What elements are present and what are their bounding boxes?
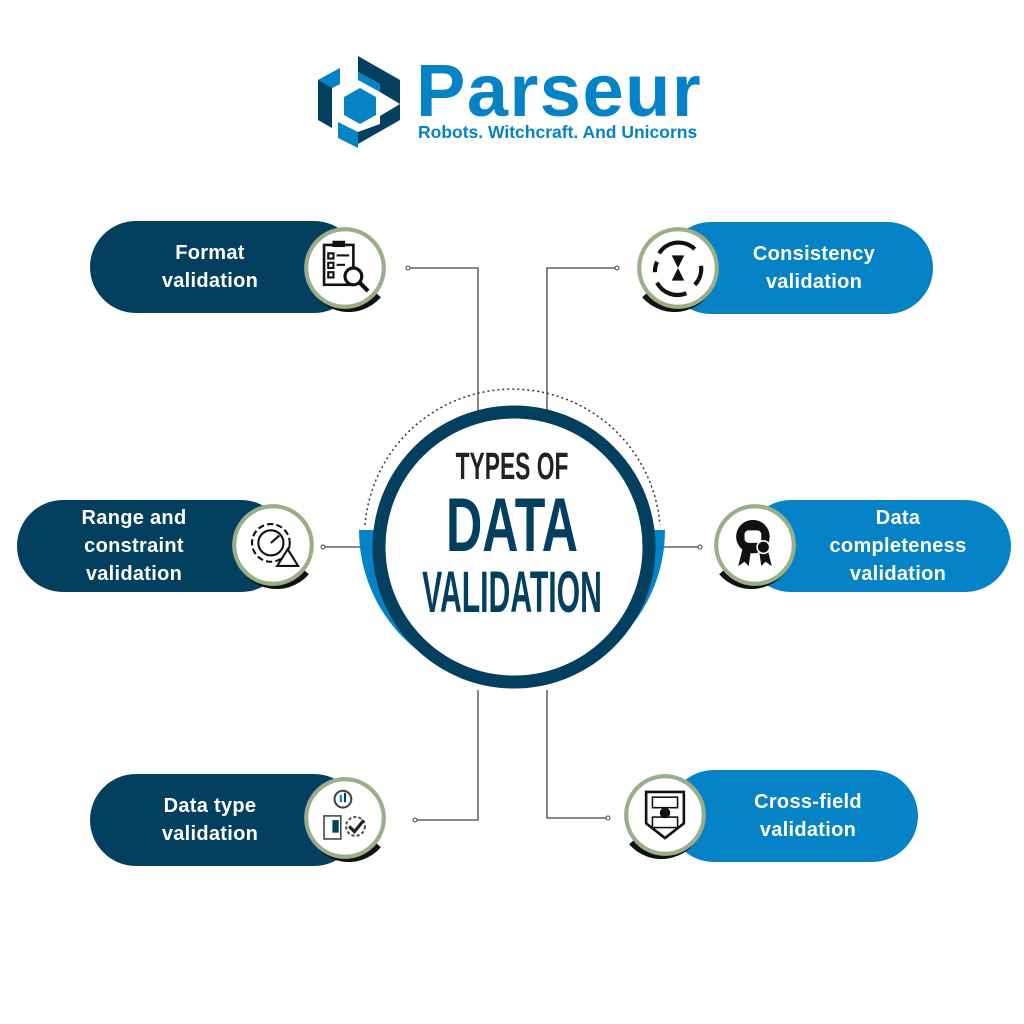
- panel: range and constraint validation: Range and: [82, 507, 186, 529]
- panel: data completeness validation: validation: [850, 563, 946, 585]
- panel: data completeness validation: completeness: [830, 535, 966, 557]
- icon: badge database: [714, 504, 796, 589]
- panel: format validation: [90, 221, 360, 313]
- panel: range and constraint validation: [17, 500, 287, 592]
- icon: clipboard magnifier: [304, 227, 386, 312]
- panel: data completeness validation: [745, 500, 1011, 592]
- title: [422, 446, 602, 625]
- tagline: Robots. Witchcraft. And Unicorns: [418, 122, 697, 142]
- panel: format validation: validation: [162, 270, 258, 292]
- title: DATA: [446, 483, 578, 568]
- panel: data type validation: validation: [162, 823, 258, 845]
- panel: cross-field validation: validation: [760, 819, 856, 841]
- panel: consistency validation: validation: [766, 271, 862, 293]
- panel: consistency validation: Consistency: [753, 243, 875, 265]
- icon: parseur cube: [318, 56, 400, 148]
- panel: data type validation: Data type: [164, 795, 256, 817]
- panel: data completeness validation: Data: [876, 507, 920, 529]
- brand name: Parseur: [416, 49, 702, 132]
- panel: consistency validation: [665, 222, 933, 314]
- panel: cross-field validation: [668, 770, 918, 862]
- panel: format validation: Format: [175, 242, 245, 264]
- logo: [318, 49, 702, 148]
- icon: data type chart gears: [304, 777, 386, 862]
- icon: shield cross-field: [624, 774, 706, 859]
- icon: gear gauge warning: [232, 504, 314, 589]
- panel: range and constraint validation: constraint: [84, 535, 184, 557]
- icon: hourglass cycle: [637, 227, 719, 312]
- panel: range and constraint validation: validation: [86, 563, 182, 585]
- panel: data type validation: [90, 774, 360, 866]
- title: VALIDATION: [422, 560, 602, 625]
- title: TYPES OF: [456, 446, 568, 488]
- panel: cross-field validation: Cross-field: [754, 791, 862, 813]
